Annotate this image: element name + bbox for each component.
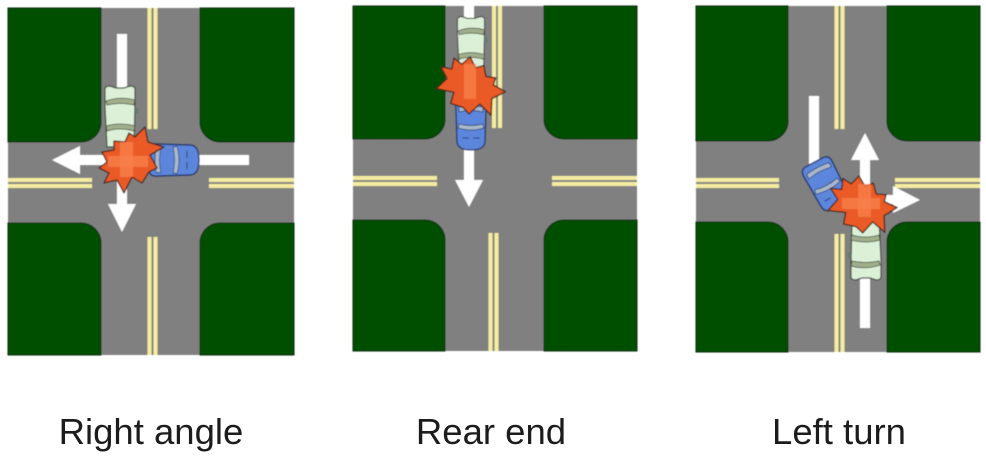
collision burst (99, 127, 164, 193)
grass corner blocks (696, 6, 980, 352)
arrow: southbound approach path (809, 96, 819, 166)
collision burst (430, 47, 510, 127)
panel: rear end collision (353, 6, 637, 351)
car: pale green car (105, 86, 138, 147)
label: rear end: Rear end (416, 411, 566, 452)
label: right angle: Right angle (59, 411, 243, 452)
car: pale green car (848, 219, 881, 280)
road surface: right angle (8, 8, 294, 355)
road surface: left turn (696, 6, 980, 352)
car: pale green car (458, 17, 488, 74)
grass corner blocks (353, 6, 637, 351)
arrow: straight-through path from north, turning south (108, 34, 136, 232)
double yellow lines (353, 6, 637, 351)
double yellow lines (696, 6, 980, 352)
road surface: rear end (353, 6, 637, 351)
panel: left turn collision (696, 6, 980, 352)
car: blue car (149, 144, 199, 176)
arrow: northbound and right-turning path (851, 133, 920, 328)
arrow: westbound path (52, 146, 249, 174)
label: left turn: Left turn (772, 411, 906, 452)
collision burst (819, 164, 904, 248)
arrow: southbound path (455, 6, 483, 207)
grass corner blocks (8, 8, 294, 355)
double yellow lines (8, 8, 294, 355)
panel: right angle collision (8, 8, 294, 355)
car: blue car (800, 155, 853, 215)
car: blue car (456, 100, 486, 150)
